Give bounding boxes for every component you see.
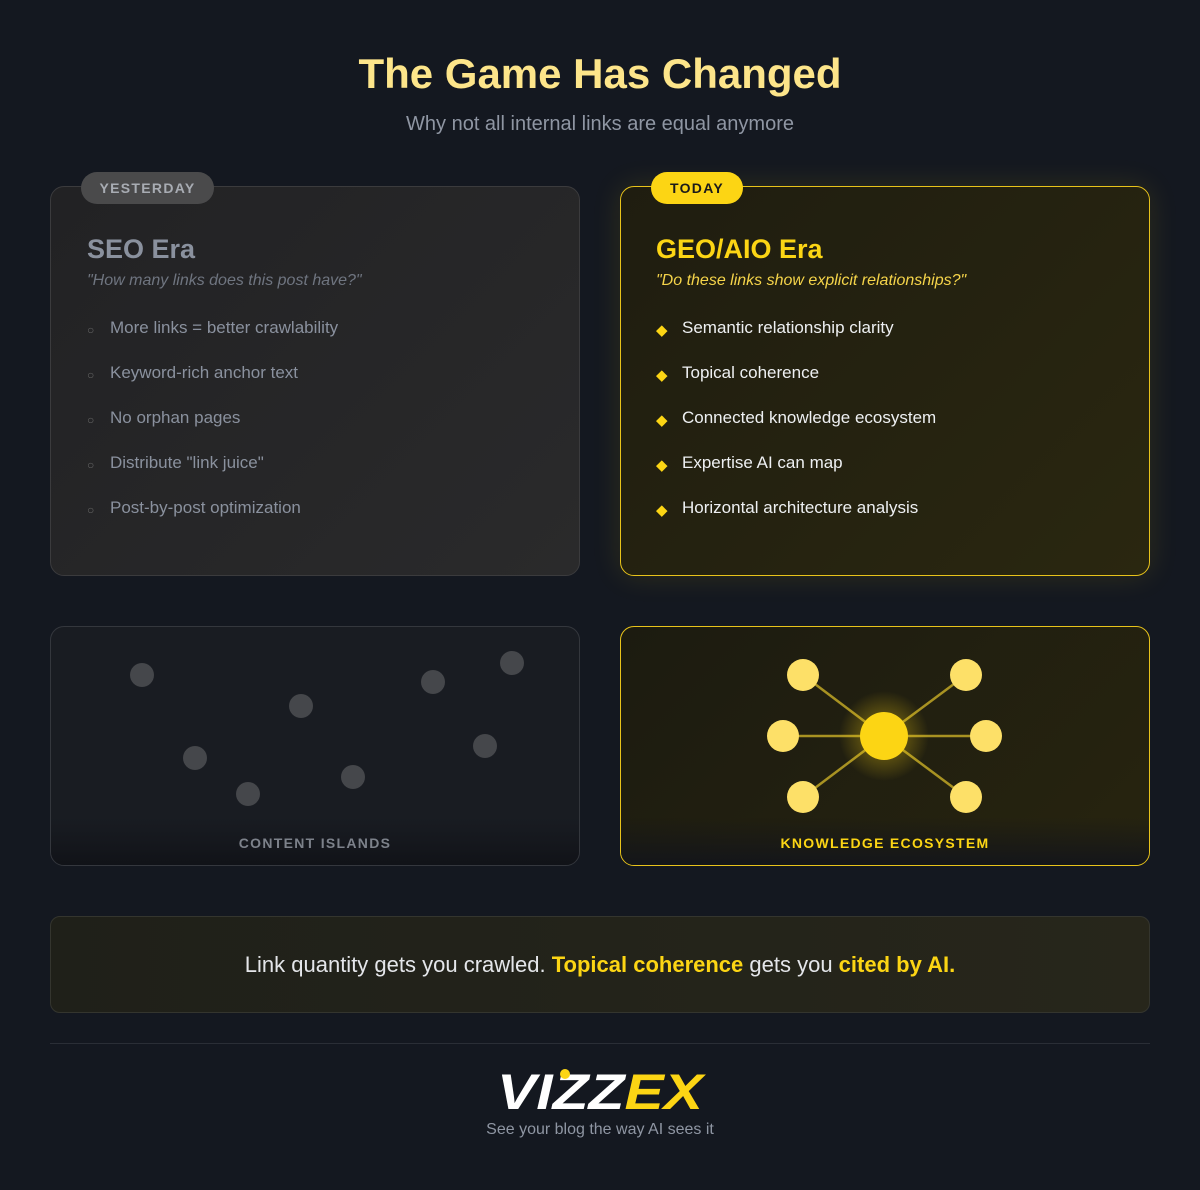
- panel: yesterday SEO era: [50, 186, 580, 576]
- list: GEO items: Connected knowledge ecosystem: [682, 408, 936, 427]
- panel: knowledge ecosystem: [620, 626, 1150, 866]
- list: SEO items: ○: [87, 368, 94, 382]
- list: GEO items: [656, 318, 936, 519]
- list: GEO items: Expertise AI can map: [682, 453, 843, 472]
- list: SEO items: [87, 318, 338, 517]
- list: SEO items: Post-by-post optimization: [110, 498, 301, 517]
- badge: today: TODAY: [670, 180, 724, 196]
- callout: key takeaway: Link quantity gets you crawled. Topical coherence gets you cited by AI.: [245, 952, 955, 977]
- panel: today GEO/AIO era: [620, 186, 1150, 576]
- list: GEO items: ◆: [656, 412, 668, 429]
- list: SEO items: More links = better crawlability: [110, 318, 338, 337]
- badge: today: [651, 172, 743, 204]
- list: SEO items: ○: [87, 503, 94, 517]
- badge: yesterday: YESTERDAY: [100, 180, 196, 196]
- subtitle: Why not all internal links are equal anymore: [406, 113, 794, 135]
- list: GEO items: Topical coherence: [682, 363, 819, 382]
- chart: scattered dots: [51, 651, 579, 865]
- heading: SEO Era: SEO Era: [87, 234, 195, 264]
- list: GEO items: Semantic relationship clarity: [682, 318, 894, 337]
- list: SEO items: Distribute "link juice": [110, 453, 264, 472]
- label: content islands: CONTENT ISLANDS: [239, 835, 391, 851]
- list: SEO items: ○: [87, 323, 94, 337]
- chart: hub network: [621, 659, 1149, 865]
- heading: GEO/AIO Era: GEO/AIO Era: [656, 234, 823, 264]
- badge: yesterday: [81, 172, 214, 204]
- callout: key takeaway: [50, 916, 1150, 1013]
- quote: "Do these links show explicit relationships?": [656, 272, 966, 289]
- list: SEO items: ○: [87, 413, 94, 427]
- list: GEO items: Horizontal architecture analysis: [682, 498, 918, 517]
- list: SEO items: ○: [87, 458, 94, 472]
- list: GEO items: ◆: [656, 502, 668, 519]
- list: GEO items: ◆: [656, 322, 668, 339]
- title: The Game Has Changed: [358, 50, 842, 97]
- list: GEO items: ◆: [656, 367, 668, 384]
- list: GEO items: ◆: [656, 457, 668, 474]
- quote: "How many links does this post have?": [87, 272, 362, 289]
- label: knowledge ecosystem: KNOWLEDGE ECOSYSTEM: [780, 835, 990, 851]
- tagline: See your blog the way AI sees it: [486, 1121, 714, 1138]
- list: SEO items: No orphan pages: [110, 408, 240, 427]
- panel: content islands: [50, 626, 580, 866]
- list: SEO items: Keyword-rich anchor text: [110, 363, 298, 382]
